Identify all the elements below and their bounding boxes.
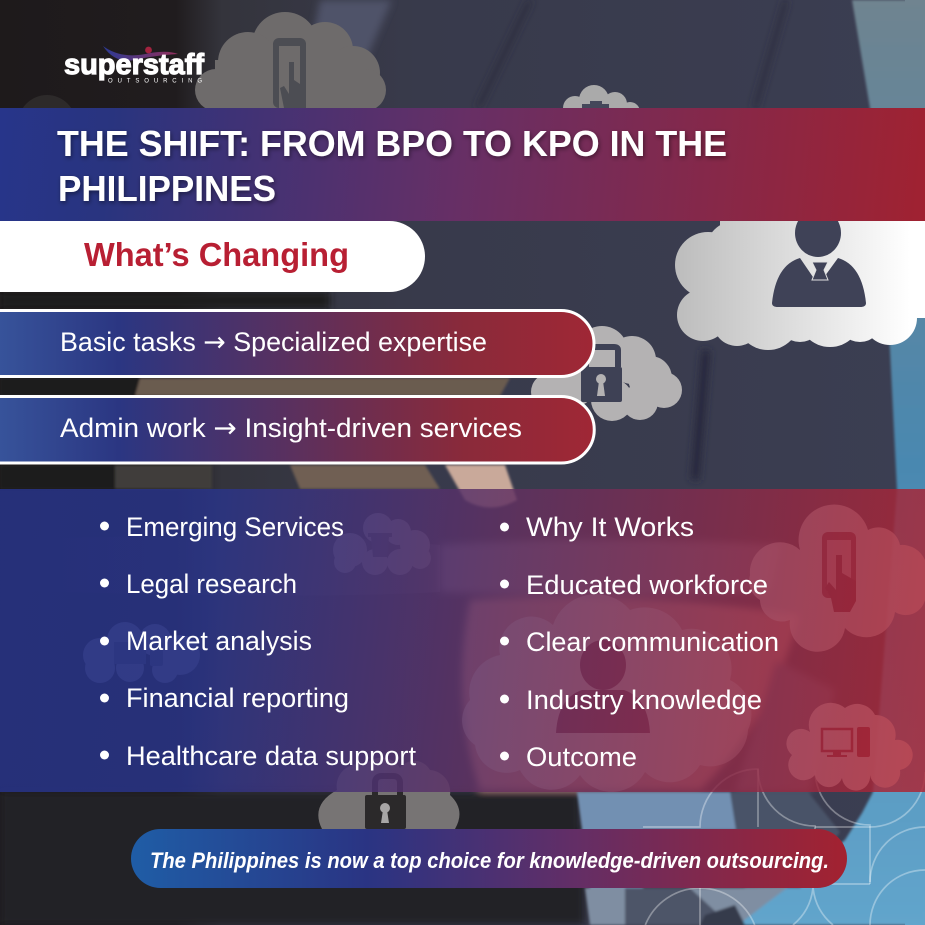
cloud: small dark, top left xyxy=(18,95,76,153)
band panel behind lists xyxy=(0,489,925,792)
title text xyxy=(57,123,727,209)
list: why it works: Outcome xyxy=(526,742,637,772)
list: emerging services: Healthcare data support xyxy=(126,741,417,771)
heading pill: What's Changing: What’s Changing xyxy=(84,237,349,274)
pill: basic tasks to specialized expertise: Basic tasks → Specialized expertise xyxy=(60,327,487,358)
list: emerging services: Emerging Services xyxy=(126,512,344,542)
list: why it works: Why It Works xyxy=(526,512,694,542)
cloud: person, large white xyxy=(675,209,925,350)
title text: PHILIPPINES xyxy=(58,168,276,209)
logo: superstaff outsourcing: superstaff xyxy=(64,49,204,81)
pill: admin work to insight-driven services: Admin work → Insight-driven services xyxy=(60,413,522,444)
cloud: phone, right xyxy=(749,505,925,652)
cloud: briefcase, top xyxy=(563,85,640,122)
cloud: phone, top xyxy=(195,12,386,111)
cloud: computer, right xyxy=(786,703,913,791)
logo: superstaff outsourcing: OUTSOURCING xyxy=(108,78,202,84)
cloud: computer, faded left xyxy=(83,622,200,683)
pill: admin work to insight-driven services xyxy=(0,396,594,463)
list: emerging services: Legal research xyxy=(126,569,297,599)
cloud: person, faded centre xyxy=(462,594,751,792)
title banner xyxy=(0,108,925,221)
list: why it works: Clear communication xyxy=(526,627,779,657)
cloud: padlock, bottom xyxy=(318,758,459,829)
footer callout pill xyxy=(131,829,847,888)
list: emerging services xyxy=(100,512,417,771)
pill: basic tasks to specialized expertise xyxy=(0,310,594,376)
heading pill: What's Changing xyxy=(0,221,425,292)
list: why it works: Educated workforce xyxy=(526,570,768,600)
footer callout pill: The Philippines is now a top choice for knowledge-driven outsourcing. xyxy=(150,848,829,873)
list: why it works xyxy=(500,512,779,772)
decorative geometric line pattern xyxy=(643,769,925,925)
title text: THE SHIFT: FROM BPO TO KPO IN THE xyxy=(57,123,727,164)
cloud: trash bin, faded xyxy=(333,513,431,575)
list: emerging services: Financial reporting xyxy=(126,683,349,713)
cloud: padlock xyxy=(531,326,682,421)
list: emerging services: Market analysis xyxy=(126,626,312,656)
list: why it works: Industry knowledge xyxy=(526,685,762,715)
